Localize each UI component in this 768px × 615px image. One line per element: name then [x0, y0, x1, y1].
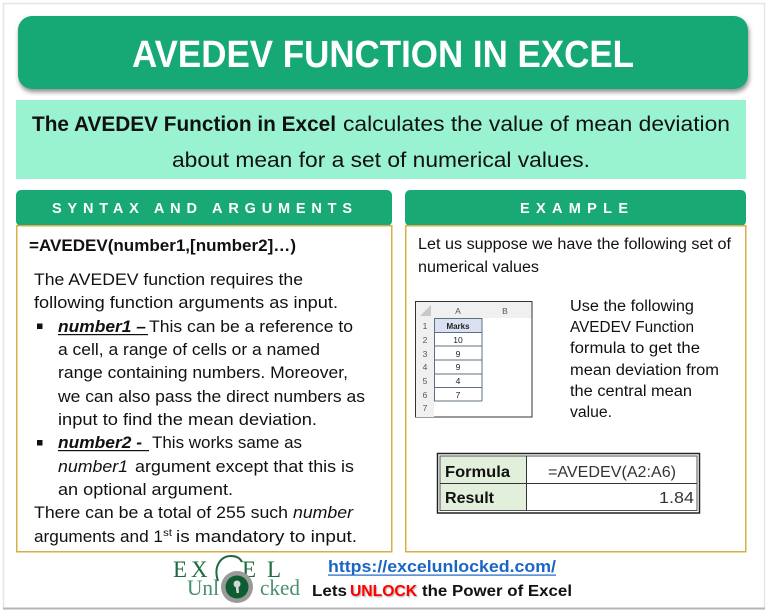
bullet: number2: number1: [58, 457, 128, 476]
definition panel: The AVEDEV Function in Excel: [32, 113, 336, 136]
heading: syntax and arguments: [16, 190, 392, 226]
formula result table: =AVEDEV(A2:A6): [548, 464, 676, 481]
tagline: Lets: [312, 583, 347, 600]
spreadsheet screenshot: A: [455, 306, 461, 316]
logo: Excel Unlocked: Unl: [187, 575, 219, 600]
spreadsheet screenshot: Marks: [446, 322, 470, 331]
bullet: number1: we can also pass the direct numbers as: [57, 387, 365, 406]
spreadsheet screenshot: 10: [453, 335, 463, 345]
formula result table: Result: [445, 490, 494, 507]
formula instructions: [570, 298, 719, 421]
logo: Excel Unlocked: E: [173, 557, 187, 582]
example intro: [418, 236, 732, 276]
example intro: Let us suppose we have the following set of: [418, 236, 732, 253]
panel: example: [405, 190, 746, 552]
definition panel: about mean for a set of numerical values.: [172, 149, 590, 172]
tagline: UNLOCK: [350, 583, 417, 600]
tagline: the Power of Excel: [422, 583, 572, 600]
title banner: [18, 16, 748, 89]
panel: syntax and arguments: [16, 190, 392, 552]
bullet: number1: input to find the mean deviation.: [58, 410, 317, 429]
formula instructions: mean deviation from: [570, 362, 719, 379]
heading: example: [405, 190, 746, 226]
formula result table: [438, 454, 700, 513]
spreadsheet screenshot: [416, 302, 532, 417]
bullet: number1: This can be a reference to: [149, 317, 353, 336]
closing note: is mandatory to input.: [176, 527, 357, 546]
syntax formula: =AVEDEV(number1,[number2]…): [29, 236, 296, 255]
bullet: number2: argument except that this is: [135, 457, 354, 476]
intro text: The AVEDEV function requires the: [34, 270, 303, 289]
title banner: AVEDEV FUNCTION IN EXCEL: [132, 34, 634, 76]
bullet: number1: number1 –: [58, 317, 147, 336]
heading: example: EXAMPLE: [520, 201, 628, 217]
example box: [406, 226, 746, 552]
spreadsheet screenshot: 9: [456, 349, 461, 359]
formula result table: 1.84: [659, 490, 694, 507]
logo: Excel Unlocked: L: [267, 557, 281, 582]
formula instructions: formula to get the: [570, 340, 700, 357]
bullet: number2: an optional argument.: [58, 480, 233, 499]
example intro: numerical values: [418, 259, 539, 276]
bullet: number2: number2 -: [58, 433, 142, 452]
logo: Excel Unlocked: E: [242, 557, 256, 582]
spreadsheet screenshot: 4: [423, 362, 428, 372]
syntax box: [17, 226, 392, 552]
spreadsheet screenshot: 5: [423, 376, 428, 386]
definition panel: calculates the value of mean deviation: [343, 113, 730, 136]
heading: syntax and arguments: SYNTAX AND ARGUMENTS: [52, 201, 352, 217]
spreadsheet screenshot: 7: [456, 390, 461, 400]
spreadsheet screenshot: 1: [423, 321, 428, 331]
spreadsheet screenshot: 7: [423, 403, 428, 413]
closing note: arguments and 1: [34, 527, 163, 546]
logo: Excel Unlocked: [173, 556, 300, 603]
bullet: number2: This works same as: [152, 433, 302, 452]
spreadsheet screenshot: 2: [423, 335, 428, 345]
intro text: [34, 270, 338, 312]
formula result table: Formula: [445, 464, 510, 481]
closing note: st: [163, 528, 172, 539]
bullet: number1: range containing numbers. Moreover,: [58, 363, 348, 382]
logo: Excel Unlocked: X: [191, 557, 208, 582]
formula instructions: AVEDEV Function: [570, 319, 694, 336]
spreadsheet screenshot: 6: [423, 390, 428, 400]
intro text: following function arguments as input.: [34, 293, 338, 312]
bullet: number2: [37, 433, 354, 499]
spreadsheet screenshot: 9: [456, 362, 461, 372]
logo: Excel Unlocked: cked: [260, 575, 300, 600]
bullet: number1: a cell, a range of cells or a named: [58, 340, 320, 359]
spreadsheet screenshot: 4: [456, 376, 461, 386]
closing note: There can be a total of 255 such: [34, 503, 288, 522]
closing note: [34, 503, 357, 546]
closing note: number: [293, 503, 354, 522]
bullet: number1: [37, 317, 365, 429]
formula instructions: value.: [570, 404, 612, 421]
tagline: [312, 583, 572, 600]
spreadsheet screenshot: 3: [423, 349, 428, 359]
website link: https://excelunlocked.com/: [328, 558, 556, 576]
formula instructions: the central mean: [570, 383, 692, 400]
spreadsheet screenshot: B: [502, 306, 508, 316]
formula instructions: Use the following: [570, 298, 694, 315]
definition panel: [16, 100, 746, 179]
